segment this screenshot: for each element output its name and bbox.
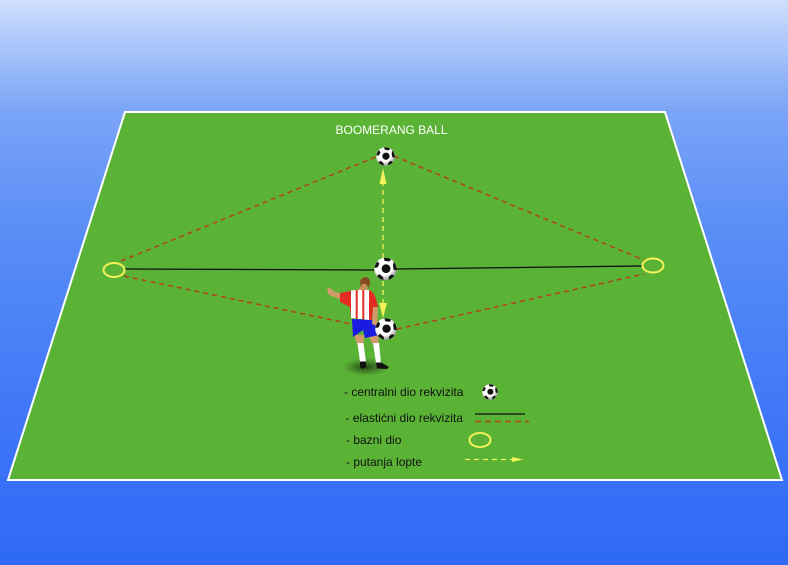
dashed elastic lines diamond (121, 156, 644, 329)
ball path arrow up (380, 168, 386, 258)
football pitch (8, 112, 782, 480)
top ball (376, 147, 395, 166)
title: BOOMERANG BALL (335, 123, 448, 137)
ball path arrow down (379, 281, 387, 318)
legend: ball path: - putanja lopte (346, 455, 422, 469)
legend: dashed line (475, 420, 529, 422)
player (327, 277, 390, 376)
legend: ball icon (482, 384, 498, 400)
left base ring (104, 263, 124, 277)
solid elastic line (125, 266, 642, 270)
legend: elastic part: - elastićni dio rekvizita (346, 411, 463, 425)
centre ball (374, 258, 397, 280)
right base ring (642, 258, 664, 272)
lower ball (375, 318, 397, 340)
legend (344, 384, 529, 469)
legend: base part: - bazni dio (346, 433, 402, 447)
legend: central part: - centralni dio rekvizita (344, 385, 464, 399)
legend: ring (470, 433, 490, 447)
legend: black line (475, 413, 525, 415)
legend: arrow (465, 457, 523, 462)
